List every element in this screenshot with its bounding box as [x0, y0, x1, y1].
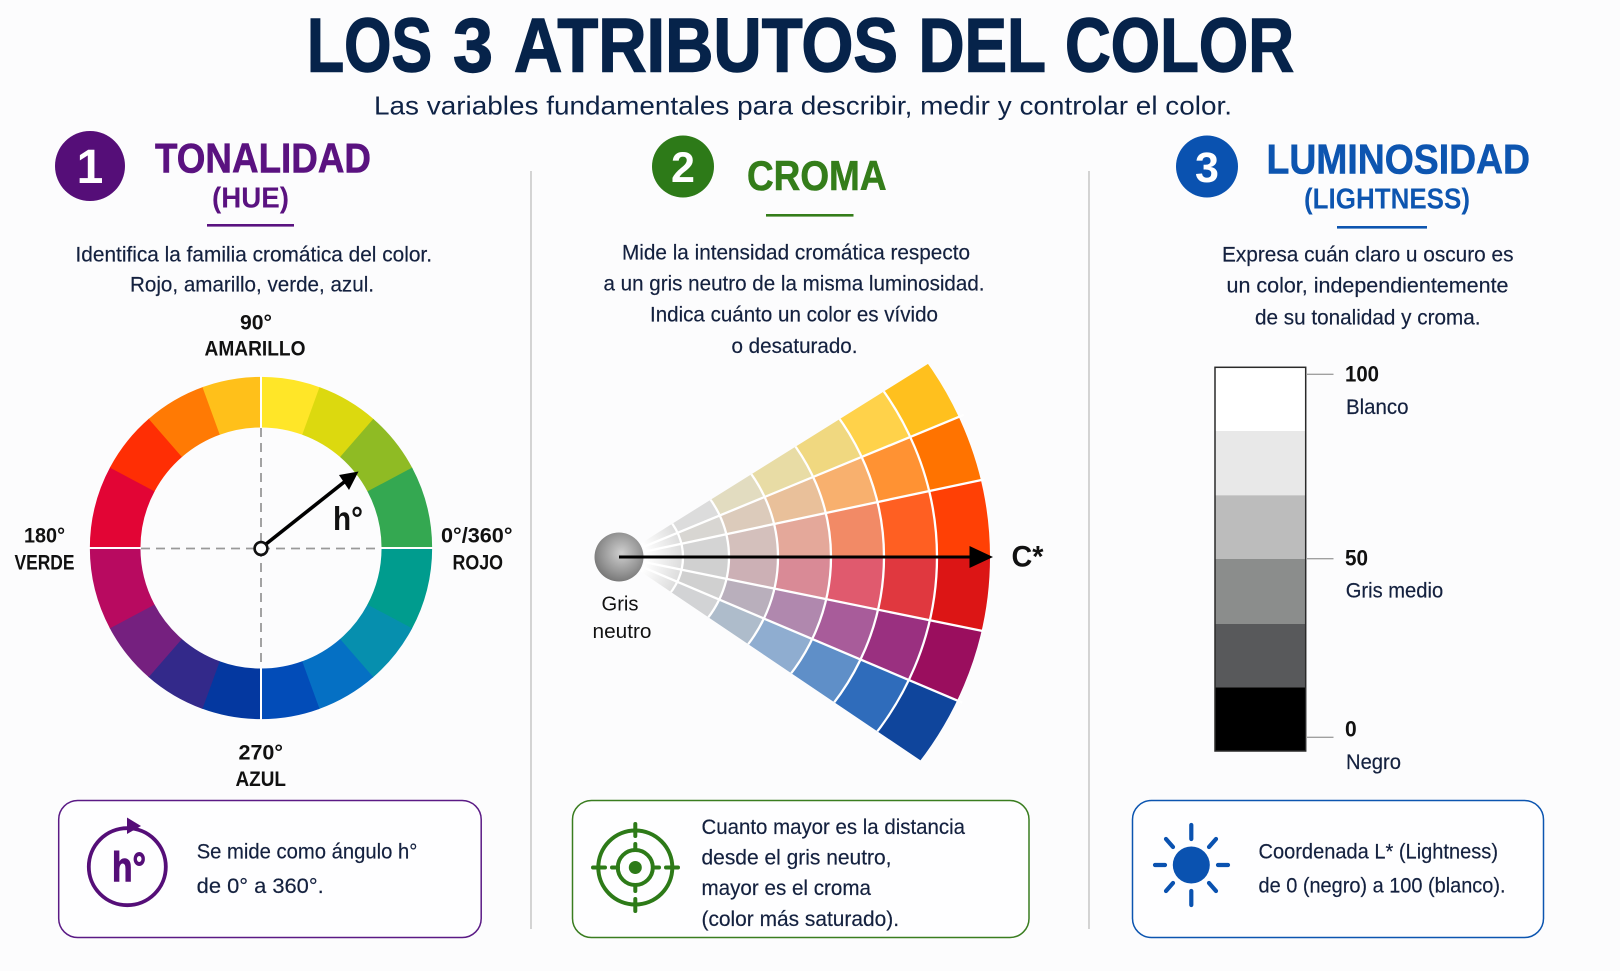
- callout: luminosidad: de 0 (negro) a 100 (blanco).: [1258, 874, 1506, 898]
- wheel labels: 270°: [238, 742, 283, 764]
- fan row: magenta: [654, 566, 982, 700]
- panel: luminosidad: [1132, 136, 1544, 938]
- callout: croma: Cuanto mayor es la distancia: [702, 816, 965, 839]
- callout: luminosidad: Coordenada L* (Lightness): [1258, 840, 1498, 864]
- scale labels: 0: [1345, 716, 1357, 742]
- callout: croma: [572, 800, 1029, 938]
- description: croma: [604, 242, 984, 358]
- heading: tonalidad: TONALIDAD: [155, 134, 371, 182]
- scale labels: Negro: [1346, 751, 1401, 774]
- fan row: yellow: [651, 364, 958, 542]
- icon: sun: [1155, 825, 1228, 905]
- icon: target: [593, 824, 678, 911]
- label: gris neutro: [592, 594, 652, 643]
- label: gris neutro: Gris: [602, 594, 638, 616]
- scale labels: 50: [1345, 546, 1368, 570]
- fan row: orange: [654, 418, 981, 548]
- description: luminosidad: un color, independientemente: [1226, 274, 1508, 298]
- description: tonalidad: [76, 244, 432, 296]
- wheel labels: AZUL: [236, 768, 286, 791]
- heading: croma: CROMA: [747, 152, 886, 199]
- panel: croma: [572, 136, 1044, 938]
- scale labels: Blanco: [1346, 396, 1408, 419]
- description: tonalidad: Rojo, amarillo, verde, azul.: [130, 274, 374, 296]
- icon: hue angle: h°: [112, 844, 146, 891]
- description: croma: Indica cuánto un color es vívido: [650, 304, 938, 326]
- wheel labels: AMARILLO: [204, 338, 306, 360]
- callout: luminosidad: [1132, 800, 1544, 938]
- fan row: red-orange: [656, 481, 990, 556]
- panel: tonalidad: [14, 131, 512, 938]
- title: ATRIBUTOS: [514, 4, 898, 88]
- heading: luminosidad: 3: [1195, 144, 1219, 192]
- heading: tonalidad: [55, 131, 371, 227]
- chart: lightness scale: [1215, 362, 1443, 774]
- heading: luminosidad: (LIGHTNESS): [1304, 184, 1470, 216]
- description: luminosidad: [1222, 244, 1514, 330]
- scale labels: [1345, 362, 1443, 774]
- scale labels: Gris medio: [1346, 580, 1443, 602]
- description: tonalidad: Identifica la familia cromática del color.: [76, 244, 432, 266]
- chart: hue wheel: h°: [333, 500, 363, 537]
- wheel labels: VERDE: [14, 552, 74, 574]
- heading: croma: [652, 136, 886, 217]
- heading: tonalidad: (HUE): [212, 182, 289, 214]
- callout: hue: de 0° a 360°.: [197, 875, 324, 898]
- heading: croma: 2: [671, 144, 695, 192]
- callout: hue: Se mide como ángulo h°: [197, 840, 417, 863]
- wheel labels: 0°/360°: [441, 524, 512, 548]
- title: 3: [453, 4, 493, 88]
- title: LOS: [307, 4, 432, 88]
- title: [307, 4, 1294, 88]
- description: luminosidad: de su tonalidad y croma.: [1255, 306, 1480, 330]
- icon: neutral gray sphere: [594, 532, 644, 582]
- callout: croma: desde el gris neutro,: [702, 846, 892, 870]
- label: gris neutro: neutro: [592, 621, 652, 643]
- callout: croma: (color más saturado).: [702, 908, 899, 931]
- arrow: chroma axis: [619, 546, 993, 568]
- description: croma: a un gris neutro de la misma luminosidad.: [604, 272, 984, 296]
- scale labels: 100: [1345, 362, 1379, 386]
- fan row: blue: [650, 573, 957, 760]
- arrow: hue angle: [255, 472, 358, 555]
- icon: hue angle: [89, 818, 166, 905]
- description: croma: o desaturado.: [732, 335, 858, 358]
- title: COLOR: [1065, 4, 1294, 88]
- heading: tonalidad: 1: [77, 141, 103, 194]
- heading: luminosidad: [1176, 136, 1530, 229]
- wheel labels: [14, 312, 512, 791]
- wheel labels: 180°: [24, 524, 65, 548]
- title: DEL: [918, 4, 1046, 88]
- heading: luminosidad: LUMINOSIDAD: [1266, 136, 1530, 182]
- fan row: red: [656, 558, 990, 630]
- callout: croma: mayor es el croma: [702, 877, 871, 900]
- chart: chroma fan: [594, 364, 1044, 760]
- description: croma: Mide la intensidad cromática respecto: [622, 242, 970, 264]
- subtitle: Las variables fundamentales para describir, medir y controlar el color.: [374, 90, 1232, 120]
- chart: chroma fan: C*: [1012, 540, 1044, 574]
- chart: hue wheel: [55, 342, 467, 754]
- wheel labels: ROJO: [452, 552, 503, 574]
- callout: hue: [59, 800, 481, 938]
- wheel labels: 90°: [240, 312, 272, 334]
- description: luminosidad: Expresa cuán claro u oscuro es: [1222, 244, 1514, 266]
